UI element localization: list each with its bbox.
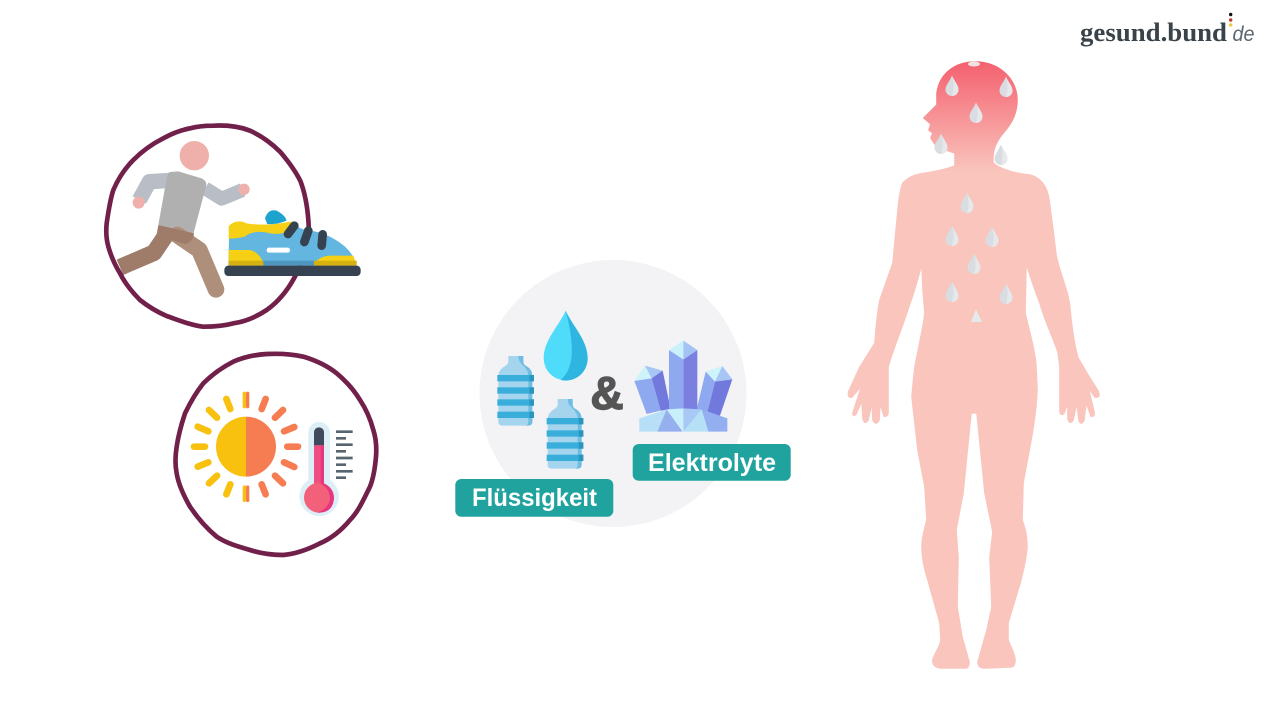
label: Flüssigkeit: [455, 479, 613, 517]
label: Elektrolyte: Elektrolyte: [648, 449, 776, 477]
ampersand: &: [590, 367, 624, 419]
icon: sun and thermometer in circle: [176, 354, 376, 555]
icon: bottle right: [547, 399, 583, 469]
figure: sweating human body: [848, 62, 1099, 668]
label: Flüssigkeit: Flüssigkeit: [472, 484, 598, 512]
logo: gesund.bund.de: de: [1232, 22, 1255, 46]
sun: [194, 392, 298, 502]
icon: water drop: [544, 311, 588, 381]
icon: crystals: [634, 341, 732, 432]
icon: bottle left: [497, 356, 534, 426]
shoe: [224, 210, 361, 276]
hand-drawn circle: [176, 354, 376, 555]
sweat drops: [934, 62, 1012, 322]
hand-drawn circle: [106, 126, 309, 327]
thermometer: [299, 422, 353, 516]
runner figure: [120, 141, 250, 289]
panel: fluid and electrolytes: [455, 260, 791, 527]
logo: gesund.bund.de: gesund.bund: [1080, 17, 1227, 47]
background circle: [480, 260, 746, 527]
icon: runner with shoe in circle: [106, 126, 361, 327]
label: Elektrolyte: [633, 444, 791, 481]
body silhouette: [848, 62, 1099, 668]
